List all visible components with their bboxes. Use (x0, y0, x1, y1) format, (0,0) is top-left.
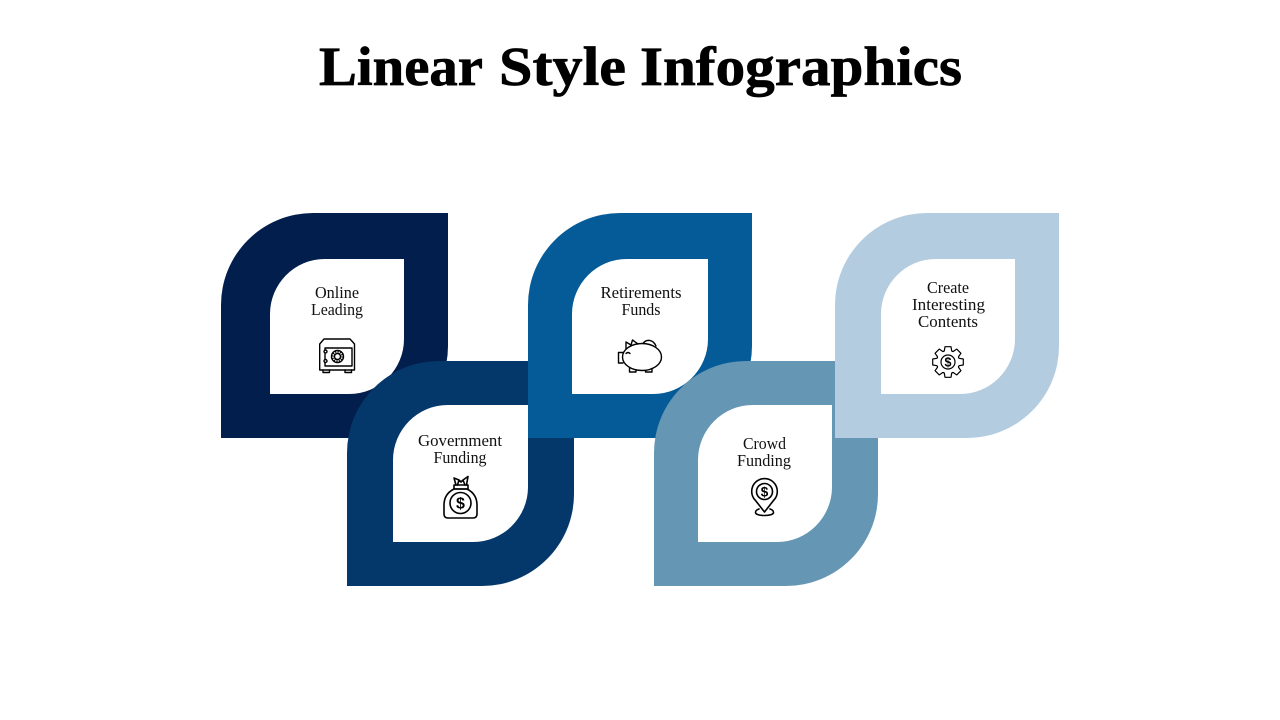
panel: government funding (347, 361, 574, 586)
label (737, 434, 791, 470)
icon: safe (320, 339, 354, 372)
leaf shape: pale blue (835, 213, 1059, 438)
title: Style (499, 36, 626, 97)
title: Infographics (640, 36, 962, 97)
label (600, 283, 682, 319)
icon: money bag: $ (456, 496, 465, 512)
label (912, 278, 985, 331)
leaf interior (270, 259, 404, 394)
title (319, 36, 962, 97)
label: Funding (737, 451, 791, 470)
label: Retirements (600, 283, 682, 302)
label: Funding (434, 448, 486, 467)
label: Online (315, 283, 359, 302)
panel: online leading (221, 213, 448, 438)
label: Crowd (743, 434, 787, 453)
leaf interior (698, 405, 832, 542)
label: Create (927, 278, 969, 297)
leaf shape: dark navy (221, 213, 448, 438)
icon: location pin with dollar (752, 479, 777, 516)
icon: gear with dollar (933, 347, 963, 377)
panel: crowd funding (654, 361, 878, 586)
label: Contents (918, 312, 978, 331)
leaf interior (393, 405, 528, 542)
label: Interesting (912, 295, 985, 314)
panel: retirement funds (528, 213, 752, 438)
icon: piggy bank (618, 340, 662, 372)
label (311, 283, 363, 319)
leaf shape: steel blue (654, 361, 878, 586)
label (418, 431, 502, 467)
icon: location pin with dollar: $ (761, 484, 769, 500)
label: Leading (311, 300, 363, 319)
label: Government (418, 431, 502, 450)
leaf interior (572, 259, 708, 394)
title: Linear (319, 36, 483, 97)
leaf interior (881, 259, 1015, 394)
panel: create interesting contents (835, 213, 1059, 438)
icon: gear with dollar: $ (945, 356, 952, 370)
icon: money bag (444, 476, 477, 518)
label: Funds (622, 300, 660, 319)
leaf shape: deep blue (347, 361, 574, 586)
leaf shape: mid blue (528, 213, 752, 438)
